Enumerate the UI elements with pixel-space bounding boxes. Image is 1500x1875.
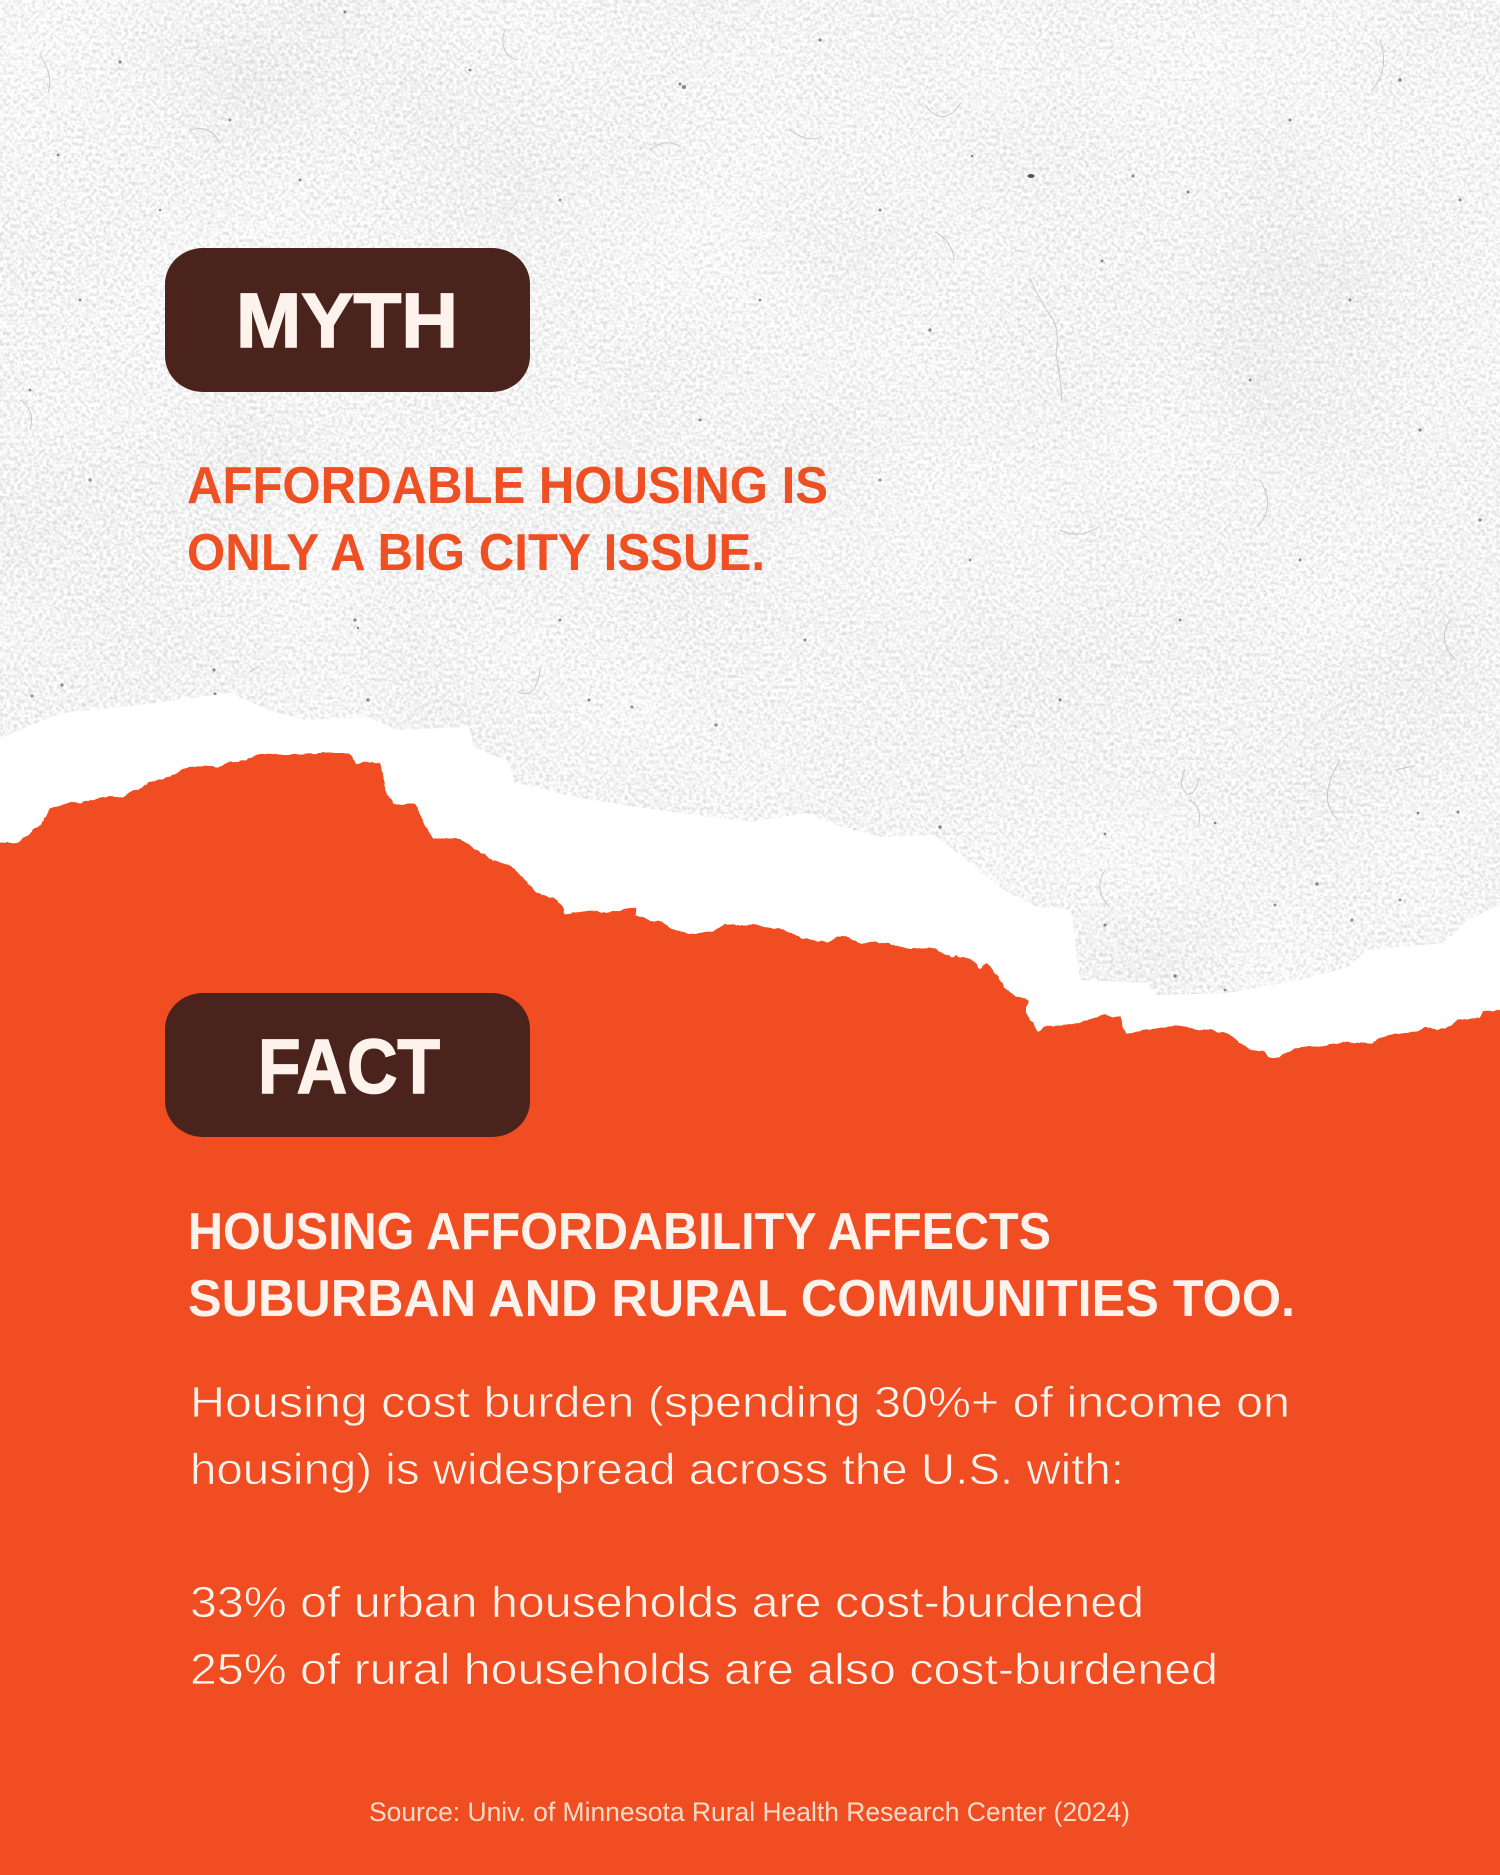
- white torn paper backing: [0, 0, 1500, 1100]
- MYTH badge: [165, 248, 530, 392]
- FACT badge: FACT: [258, 1024, 440, 1110]
- fact headline: [188, 1203, 1295, 1328]
- FACT badge: [165, 993, 530, 1137]
- myth statement: [187, 457, 828, 582]
- source note: Source: Univ. of Minnesota Rural Health Research Center (2024): [369, 1797, 1130, 1827]
- MYTH badge: MYTH: [236, 278, 458, 364]
- fact explanation text: [190, 1378, 1290, 1494]
- myth statement: AFFORDABLE HOUSING IS: [187, 457, 828, 515]
- fact explanation text: Housing cost burden (spending 30%+ of income on: [190, 1378, 1290, 1427]
- fact headline: SUBURBAN AND RURAL COMMUNITIES TOO.: [188, 1270, 1295, 1328]
- fact headline: HOUSING AFFORDABILITY AFFECTS: [188, 1203, 1051, 1261]
- fact explanation text: housing) is widespread across the U.S. with:: [190, 1445, 1124, 1494]
- cost-burden statistics: [190, 1578, 1218, 1694]
- cost-burden statistics: 25% of rural households are also cost-burdened: [190, 1645, 1218, 1694]
- cost-burden statistics: 33% of urban households are cost-burdened: [190, 1578, 1144, 1627]
- myth statement: ONLY A BIG CITY ISSUE.: [187, 524, 765, 582]
- orange torn paper panel: [0, 753, 1500, 1875]
- textured grey paper background: [0, 0, 1500, 1030]
